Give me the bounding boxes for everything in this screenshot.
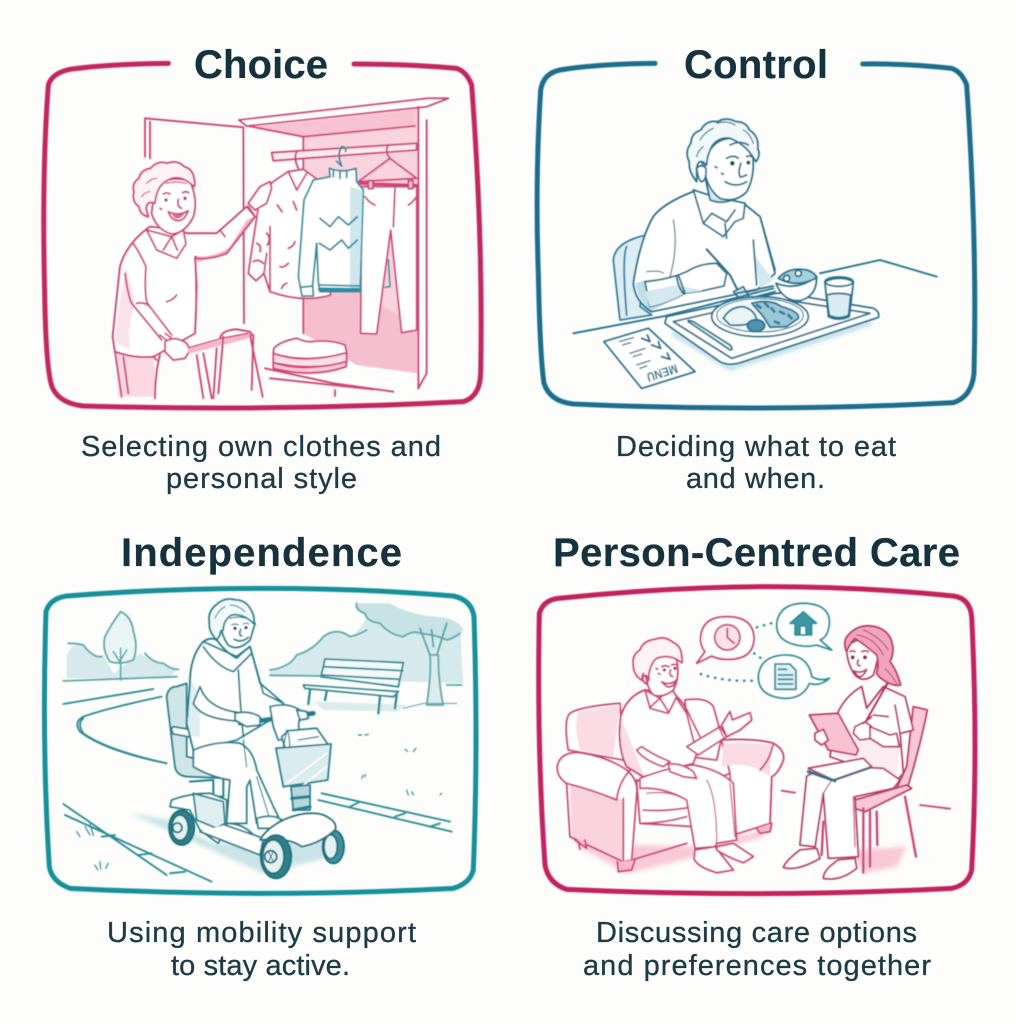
caption: person-centred care: Discussing care options [596, 917, 917, 949]
bubble: house [777, 603, 832, 650]
caption: control [616, 431, 896, 495]
frame: independence [44, 588, 476, 893]
dotted connectors [701, 623, 773, 681]
wheels [169, 810, 344, 878]
older woman [620, 638, 753, 873]
panel: person-centred care [539, 531, 975, 982]
panel: independence [44, 531, 476, 982]
speech bubbles [697, 603, 832, 698]
scooter body [291, 785, 310, 810]
caption: person-centred care: and preferences together [583, 950, 931, 982]
illustration frame and drawing: independence [44, 588, 476, 893]
armchair [557, 699, 784, 872]
tray with food [665, 269, 879, 368]
caption: choice: Selecting own clothes and [81, 431, 441, 463]
caption: choice: personal style [166, 463, 357, 495]
folded clothes and shelf [265, 338, 427, 396]
shirt [248, 169, 331, 298]
caption: control: Deciding what to eat [616, 431, 896, 463]
frame: control [537, 63, 975, 408]
person on scooter [167, 599, 331, 855]
clothes on rail [248, 145, 417, 334]
caption: choice [81, 431, 441, 495]
caption: independence: Using mobility support [107, 917, 416, 949]
caption: control: and when. [686, 463, 825, 495]
wardrobe [145, 98, 448, 388]
caption: person-centred care [583, 917, 931, 982]
head [220, 609, 255, 647]
legs [193, 742, 278, 823]
illustration frame and drawing: choice [44, 63, 481, 408]
bubble: document [758, 655, 829, 698]
frame: choice [44, 63, 481, 408]
heading: person-centred care: Person-Centred Care [553, 531, 960, 575]
menu card [604, 328, 695, 388]
scooter shadow [130, 813, 347, 873]
heading: choice: Choice [194, 43, 328, 87]
man eating [633, 119, 775, 312]
panel: choice [44, 43, 481, 495]
table [573, 260, 937, 333]
bubble: clock [697, 617, 754, 663]
pants [361, 187, 417, 334]
illustration frame and drawing: person-centred care [539, 587, 975, 894]
heading: control: Control [684, 43, 828, 87]
woman with walker [113, 162, 272, 397]
hands and handlebar [240, 713, 313, 723]
sweater [298, 147, 390, 296]
chair [613, 235, 652, 320]
pathways [63, 689, 452, 882]
care worker [783, 626, 927, 879]
heading: independence: Independence [121, 531, 402, 575]
caption: independence: to stay active. [171, 950, 350, 982]
bench [303, 659, 407, 713]
illustration frame and drawing: control [537, 63, 975, 408]
walker [155, 329, 263, 398]
caption: independence [107, 917, 416, 982]
menu card: MENU [645, 361, 679, 384]
floor marks and shadow [573, 791, 950, 873]
park background [63, 603, 463, 708]
frame: person-centred care [539, 587, 975, 894]
coat [187, 642, 283, 750]
basket [282, 728, 328, 753]
seat [167, 683, 237, 778]
panel: control [537, 43, 975, 495]
